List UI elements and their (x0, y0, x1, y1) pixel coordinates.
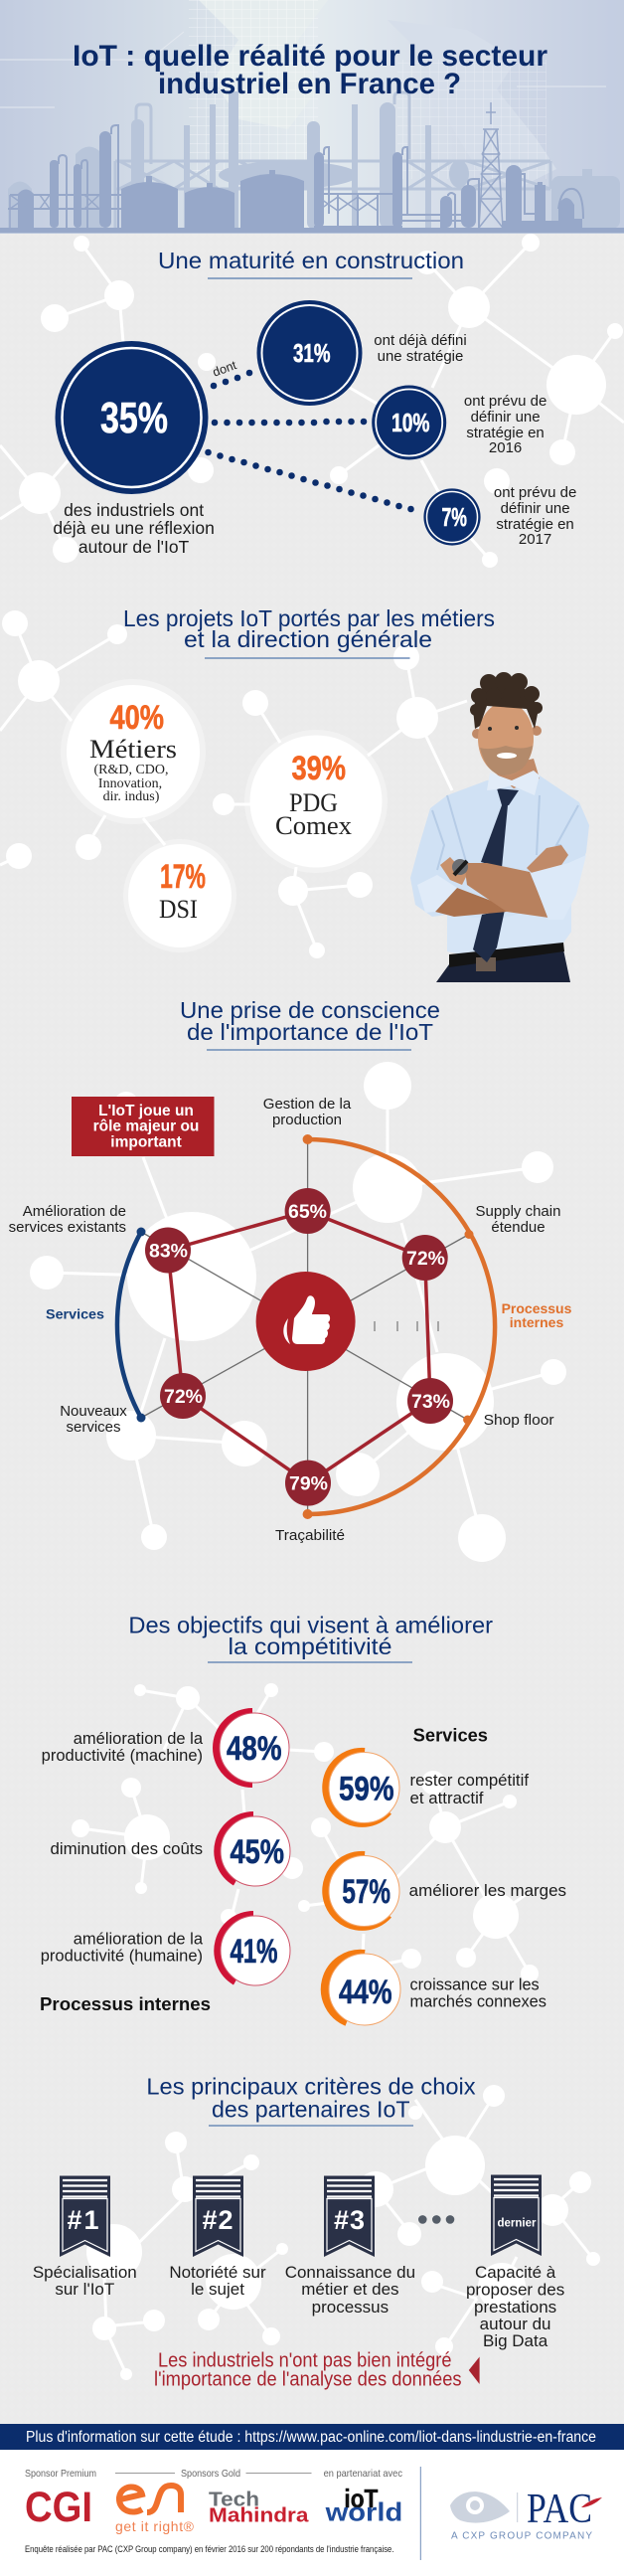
bubble: métiers: 40% (109, 699, 164, 737)
hub icon: thumbs up (256, 1272, 356, 1371)
heading: de l'importance de l'IoT (187, 1019, 433, 1045)
text: 7% label: 2017 (519, 531, 551, 548)
header banner (0, 0, 624, 234)
label: capacité: prestations (474, 2298, 556, 2317)
sponsor labels (25, 2468, 402, 2480)
survey note: Enquête réalisée par PAC (CXP Group company) en février 2016 sur 200 répondants de l'industrie française. (25, 2544, 393, 2554)
info banner (0, 2424, 624, 2450)
sponsor labels: Sponsor Premium (25, 2468, 96, 2480)
text: 10% label: ont prévu de (464, 393, 546, 410)
gauge: 41% (218, 1915, 290, 1985)
label: connaissance: processus (312, 2298, 389, 2317)
label: services: Services (46, 1306, 104, 1322)
logo: CGI: CGI (25, 2484, 92, 2531)
callout: role majeur: important (110, 1133, 182, 1151)
section: des objectifs (40, 1613, 566, 2025)
title: IoT : quelle réalité pour le secteur (73, 40, 547, 73)
sponsor labels: en partenariat avec (324, 2468, 402, 2480)
section: les principaux critères (33, 2074, 564, 2391)
section: une prise de conscience (9, 997, 572, 1544)
gauge: 45%: 45% (231, 1833, 284, 1871)
heading (128, 1613, 493, 1659)
label: processus internes (502, 1300, 572, 1330)
label: améliorer les marges: améliorer les marges (409, 1882, 566, 1900)
label: gestion de la production: production (272, 1112, 342, 1128)
gauge: 59%: 59% (339, 1771, 393, 1808)
label: shop floor: Shop floor (484, 1412, 554, 1429)
label: connaissance: Connaissance du (285, 2263, 415, 2282)
arc: services (117, 1227, 145, 1422)
label: productivité humaine: amélioration de la (74, 1931, 204, 1949)
dotted connectors (205, 370, 414, 512)
ribbon: #1: #1 (67, 2205, 101, 2235)
sponsor labels: Sponsors Gold (181, 2468, 240, 2480)
nodes with values (145, 1188, 453, 1506)
logo: Tech Mahindra (209, 2490, 309, 2526)
label: traçabilité: Traçabilité (275, 1527, 345, 1544)
nodes with values: 72% (406, 1249, 445, 1270)
arrow: red triangle (469, 2356, 480, 2384)
title (73, 40, 547, 100)
radar spokes (141, 1139, 469, 1514)
text: 7% label: définir une (501, 500, 570, 517)
label: nouveaux services: services (66, 1419, 121, 1436)
label: rester compétitif: et attractif (409, 1790, 484, 1807)
bubble: PDG Comex: PDG (289, 788, 338, 817)
text: 10% label: définir une (471, 409, 541, 426)
logo: Tech Mahindra: Tech (209, 2490, 259, 2511)
gauge: 44%: 44% (339, 1974, 391, 2011)
label: capacité (466, 2263, 564, 2350)
stat: 31% (256, 300, 362, 406)
bubble: métiers: Métiers (89, 735, 177, 764)
section: les projets IoT (61, 605, 589, 982)
callout: role majeur: rôle majeur ou (93, 1117, 199, 1135)
label: productivité humaine (41, 1931, 204, 1966)
label: capacité: Big Data (483, 2331, 548, 2350)
ribbon: #1 (60, 2175, 110, 2257)
gauge: 57%: 57% (342, 1873, 390, 1911)
label: connaissance: métier et des (301, 2280, 399, 2299)
bubble: PDG Comex (244, 730, 388, 873)
logo: IoT world: ioT (344, 2484, 378, 2513)
label: rester compétitif (409, 1772, 529, 1807)
ribbon: #2: #2 (202, 2205, 234, 2235)
label: processus internes: Processus (502, 1300, 572, 1316)
stat: 31%: 31% (293, 338, 330, 368)
text: des industriels: autour de l'IoT (78, 537, 190, 557)
footer (0, 2450, 624, 2576)
text: 31% label: ont déjà défini (374, 332, 467, 349)
bubble: DSI: 17% (160, 858, 206, 896)
ribbon: #2 (193, 2175, 243, 2257)
text: 31% label: une stratégie (378, 348, 463, 365)
bubble: DSI (123, 839, 236, 952)
bubble: métiers: Innovation, (98, 776, 162, 791)
label: amélioration services (9, 1203, 126, 1236)
red conclusion: Les industriels n'ont pas bien intégré (158, 2350, 451, 2372)
text: 10% label (464, 393, 546, 456)
stat: 35%: 35% (100, 394, 168, 442)
label: dont: dont (211, 358, 238, 380)
label: capacité: autour du (480, 2315, 551, 2333)
stat: 35% (56, 341, 209, 494)
heading: Une prise de conscience (180, 997, 440, 1023)
label: croissance: marchés connexes (409, 1993, 546, 2011)
heading (180, 997, 440, 1045)
red conclusion (154, 2350, 462, 2391)
bubble: métiers: (R&D, CDO, (93, 763, 169, 777)
label: croissance (409, 1976, 546, 2011)
label: capacité: Capacité à (475, 2263, 556, 2282)
text: des industriels: des industriels ont (64, 500, 204, 520)
label: productivité machine: productivité (machine) (42, 1747, 203, 1765)
ribbon: #3 (324, 2175, 375, 2257)
label: notoriété (169, 2263, 266, 2299)
text: 10% label: 2016 (489, 439, 522, 456)
label: supply chain: étendue (491, 1219, 546, 1236)
ribbon: #3: #3 (334, 2205, 366, 2235)
label: spécialisation: Spécialisation (33, 2263, 137, 2282)
callout: role majeur: L'IoT joue un (98, 1103, 194, 1119)
bubble: métiers: dir. indus) (103, 789, 160, 804)
text: 7% label: ont prévu de (494, 484, 576, 501)
logo: IoT world: world (324, 2497, 402, 2527)
logo: esi: get it right® (115, 2518, 195, 2534)
nodes with values: 72% (164, 1387, 203, 1408)
label: capacité: proposer des (466, 2281, 564, 2300)
text: 31% label (374, 332, 467, 365)
ellipsis dots (418, 2215, 454, 2224)
label: gestion de la production: Gestion de la (263, 1096, 352, 1113)
arc: processus internes (303, 1134, 495, 1519)
gauge: 48% (217, 1712, 289, 1784)
label: productivité humaine: productivité (humaine) (41, 1948, 203, 1966)
label: nouveaux services (60, 1403, 127, 1436)
heading: Les projets IoT portés par les métiers (123, 605, 495, 631)
gauge: 44% (325, 1954, 400, 2025)
label: supply chain (476, 1203, 560, 1236)
heading: Les principaux critères de choix (146, 2074, 476, 2100)
logo: PAC: PAC (527, 2487, 592, 2532)
front skyline (0, 102, 624, 234)
nodes with values: 65% (288, 1202, 327, 1223)
stat: 7%: 7% (441, 502, 467, 532)
text: 10% label: stratégie en (466, 425, 545, 441)
label: productivité machine: amélioration de la (74, 1730, 204, 1748)
heading (146, 2074, 476, 2122)
logo: IoT world (324, 2484, 402, 2527)
nodes with values: 73% (411, 1392, 450, 1413)
gauge: 41%: 41% (231, 1933, 278, 1971)
label: diminution des coûts: diminution des coûts (50, 1840, 203, 1858)
gauge: 59% (326, 1752, 399, 1823)
section: une maturité en construction (53, 248, 576, 557)
stat: 7% (423, 488, 481, 546)
bubble: PDG Comex: Comex (275, 811, 352, 840)
logo: PAC (450, 2487, 602, 2541)
stat: 10%: 10% (391, 408, 429, 437)
heading: des partenaires IoT (212, 2096, 409, 2122)
bubble: métiers (61, 679, 206, 824)
text: des industriels: déjà eu une réflexion (53, 518, 215, 538)
gauge: 57% (326, 1855, 399, 1927)
back skyline (8, 91, 620, 229)
label: processus internes: internes (510, 1314, 563, 1330)
callout: role majeur (72, 1097, 215, 1156)
photo: businessman with crossed arms (410, 672, 589, 982)
heading: la compétitivité (229, 1633, 391, 1659)
label: notoriété: Notoriété sur (169, 2263, 266, 2282)
label: spécialisation (33, 2263, 137, 2299)
bubble: PDG Comex: 39% (292, 750, 346, 787)
radar polygon (168, 1211, 430, 1483)
label: gestion de la production (263, 1096, 352, 1128)
text: 7% label: stratégie en (496, 516, 574, 533)
gauge: 48%: 48% (227, 1730, 282, 1768)
small ticks (375, 1321, 438, 1331)
nodes with values: 83% (149, 1241, 188, 1263)
label: nouveaux services: Nouveaux (60, 1403, 127, 1420)
text: 7% label (494, 484, 576, 548)
label: croissance: croissance sur les (409, 1976, 540, 1994)
ribbon: dernier (491, 2175, 542, 2256)
label: processus internes: Processus internes (40, 1994, 211, 2014)
label: services: Services (413, 1726, 488, 1746)
text: des industriels (53, 500, 215, 557)
heading: Une maturité en construction (158, 248, 464, 273)
title: industriel en France ? (158, 68, 461, 100)
heading (123, 605, 495, 652)
label: amélioration services: Amélioration de (23, 1203, 126, 1220)
label: spécialisation: sur l'IoT (55, 2280, 114, 2299)
label: rester compétitif: rester compétitif (409, 1772, 529, 1790)
logo: PAC: A CXP GROUP COMPANY (451, 2531, 592, 2541)
bubble: DSI: DSI (159, 895, 198, 924)
gauge: 45% (218, 1815, 290, 1886)
label: connaissance (285, 2263, 415, 2317)
ribbon: dernier: dernier (497, 2217, 537, 2229)
label: notoriété: le sujet (191, 2280, 244, 2299)
label: supply chain: Supply chain (476, 1203, 560, 1220)
heading: et la direction générale (184, 626, 432, 652)
nodes with values: 79% (289, 1473, 328, 1495)
stat: 10% (372, 386, 446, 459)
logo: esi (115, 2486, 195, 2534)
red conclusion: l'importance de l'analyse des données (154, 2369, 462, 2391)
logo: Tech Mahindra: Mahindra (209, 2504, 309, 2526)
label: amélioration services: services existants (9, 1219, 126, 1236)
heading: Des objectifs qui visent à améliorer (128, 1613, 493, 1638)
label: productivité machine (42, 1730, 204, 1765)
